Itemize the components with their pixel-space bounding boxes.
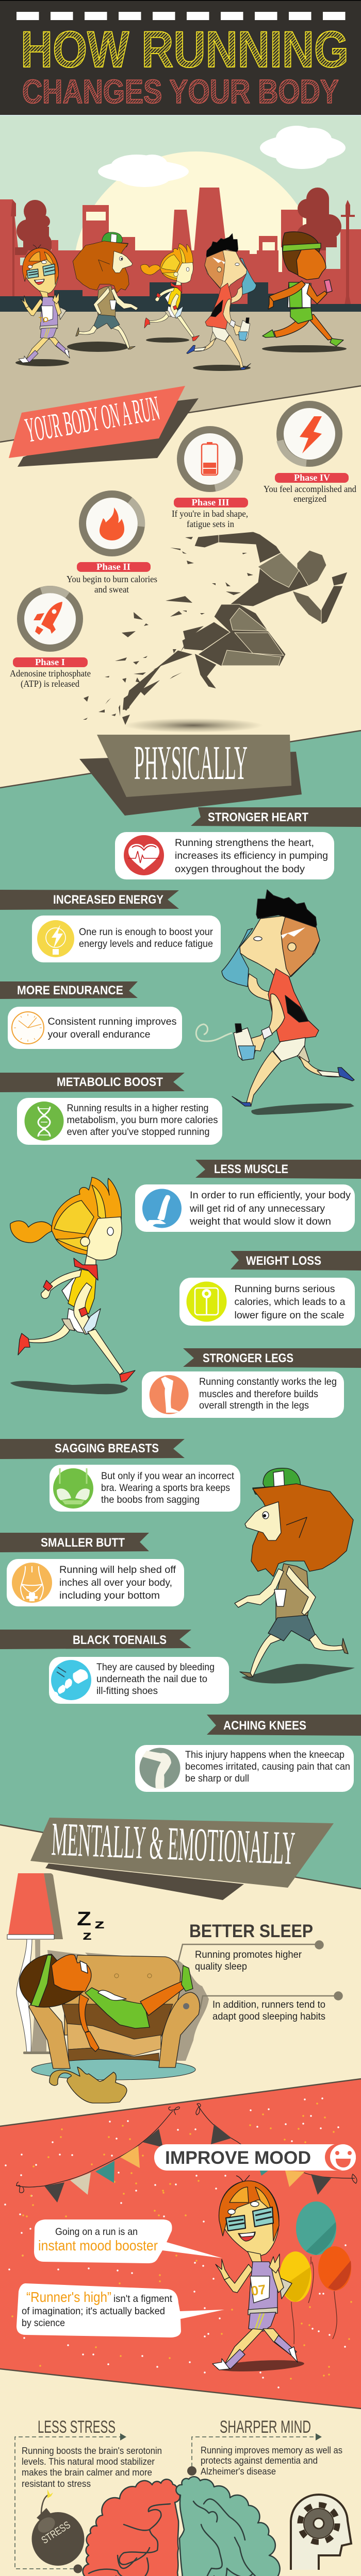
speech bubble: mood booster: Going on a run is an bbox=[55, 2226, 138, 2238]
banner: physically bbox=[79, 735, 302, 816]
ribbon: weight loss bbox=[231, 1251, 361, 1270]
sleep zzz: z bbox=[83, 1927, 92, 1943]
mood booster emphasis: instant mood booster bbox=[38, 2238, 158, 2253]
metabolic text: metabolism, you burn more calories bbox=[67, 1114, 218, 1126]
label: phase I bbox=[13, 657, 88, 667]
knees text: This injury happens when the kneecap bbox=[185, 1749, 344, 1760]
ribbon: stronger legs: STRONGER LEGS bbox=[203, 1351, 293, 1365]
runner: bearded bbox=[73, 232, 138, 349]
knees text: be sharp or dull bbox=[185, 1773, 249, 1784]
endurance text: your overall endurance bbox=[47, 1029, 151, 1040]
better sleep connector bbox=[178, 1941, 323, 1963]
runner: blonde bbox=[141, 244, 200, 341]
phase III bbox=[172, 430, 248, 529]
bra text: the boobs from sagging bbox=[101, 1494, 200, 1505]
phase II bbox=[67, 494, 157, 595]
phase IV text: You feel accomplished and bbox=[264, 484, 356, 494]
sharper mind text: Alzheimer's disease bbox=[201, 2466, 276, 2477]
second text: adapt good sleeping habits bbox=[212, 2011, 325, 2022]
ribbon: smaller butt: SMALLER BUTT bbox=[41, 1536, 125, 1550]
ribbon: less muscle bbox=[195, 1160, 361, 1179]
icon: rocket bbox=[34, 602, 62, 635]
legs text: muscles and therefore builds bbox=[199, 1388, 318, 1400]
icon: head with gear bbox=[290, 2494, 352, 2570]
ribbon: stronger heart bbox=[191, 807, 361, 827]
runners shadows bbox=[15, 337, 347, 371]
butt text: inches all over your body, bbox=[59, 1577, 172, 1588]
toenails text: underneath the nail due to bbox=[96, 1673, 207, 1685]
panel: more endurance bbox=[8, 1007, 182, 1049]
phase IV title: Phase IV bbox=[294, 472, 330, 483]
panel: metabolic boost bbox=[17, 1098, 222, 1145]
less stress text: makes the brain calmer and more bbox=[22, 2467, 152, 2478]
icon: heart bbox=[124, 835, 164, 875]
icon: lightning bbox=[300, 416, 322, 453]
phase II title: Phase II bbox=[96, 562, 130, 572]
icon: butt bbox=[12, 1563, 52, 1603]
green physical section bbox=[0, 731, 361, 1889]
icon: shattered sprinter bbox=[83, 532, 348, 725]
bunting right bbox=[196, 2104, 357, 2195]
connector: less stress bbox=[15, 2433, 126, 2573]
banner: your body on a run bbox=[9, 386, 199, 467]
phase IV bbox=[264, 404, 356, 504]
panel: weight loss bbox=[179, 1278, 355, 1326]
icon: light bulb bbox=[37, 920, 74, 957]
toenails text: They are caused by bleeding bbox=[96, 1662, 215, 1673]
ribbon: aching knees: ACHING KNEES bbox=[223, 1719, 306, 1733]
muscle text: In order to run efficiently, your body bbox=[190, 1190, 351, 1201]
ribbon: increased energy bbox=[0, 890, 179, 910]
heading: less stress: LESS STRESS bbox=[38, 2417, 116, 2437]
sleep zzz bbox=[77, 1908, 105, 1943]
better sleep heading: BETTER SLEEP bbox=[189, 1921, 313, 1941]
less stress text: Running boosts the brain's serotonin bbox=[22, 2446, 162, 2456]
cat bbox=[50, 2067, 127, 2103]
runner: glasses large bbox=[212, 2175, 298, 2370]
bra text: bra. Wearing a sports bra keeps bbox=[101, 1482, 230, 1494]
runner: towel and bottle bbox=[187, 233, 256, 369]
butt text: Running will help shed off bbox=[59, 1564, 176, 1575]
city skyline bbox=[0, 188, 361, 313]
icon: thin arm bbox=[142, 1189, 182, 1228]
panel: less muscle bbox=[135, 1184, 355, 1232]
speech bubble: runner's high: “Runner's high” bbox=[26, 2289, 111, 2305]
runner: glasses, bib TO bbox=[19, 245, 70, 363]
panel: aching knees bbox=[135, 1745, 354, 1792]
metabolic text: Running results in a higher resting bbox=[67, 1103, 208, 1114]
legs text: Running constantly works the leg bbox=[199, 1376, 337, 1387]
sharper mind text: Running improves memory as well as bbox=[201, 2445, 342, 2455]
metabolic text: even after you've stopped running bbox=[67, 1126, 209, 1138]
phase I title: Phase I bbox=[35, 657, 65, 667]
runner: headband and juice bbox=[262, 232, 343, 346]
sleeping runner bbox=[20, 1954, 193, 2052]
runner's high text: of imagination; it's actually backed bbox=[22, 2306, 165, 2317]
icon: scale bbox=[187, 1282, 227, 1322]
sleep zzz: z bbox=[94, 1916, 105, 1931]
runner: blonde large bbox=[10, 1177, 135, 1382]
panel: stronger legs bbox=[142, 1371, 344, 1418]
heading: sharper mind: SHARPER MIND bbox=[220, 2417, 311, 2437]
title panel bbox=[0, 0, 361, 116]
butt text: including your bottom bbox=[59, 1590, 160, 1601]
sky panel bbox=[0, 115, 361, 321]
heart text: Running strengthens the heart, bbox=[175, 837, 314, 849]
ribbon: increased energy: INCREASED ENERGY bbox=[53, 893, 163, 907]
label: phase III bbox=[174, 498, 248, 507]
icon: brain bbox=[83, 2477, 280, 2576]
lamp bbox=[7, 1873, 63, 2054]
sofa and sleeping runner bbox=[20, 1950, 209, 2103]
icon: sports bra bbox=[53, 1468, 93, 1509]
ribbon: more endurance bbox=[0, 981, 138, 999]
runner: bearded large shadow bbox=[241, 1664, 355, 1684]
panel: increased energy bbox=[32, 916, 221, 962]
ribbon: metabolic boost bbox=[0, 1073, 185, 1092]
phase II text: You begin to burn calories bbox=[67, 574, 157, 584]
improve mood pill: IMPROVE MOOD bbox=[165, 2148, 311, 2168]
panel: black toenails bbox=[49, 1657, 229, 1704]
icon: knee bbox=[139, 1748, 180, 1789]
second text: In addition, runners tend to bbox=[212, 1999, 325, 2010]
ribbon: black toenails bbox=[0, 1630, 191, 1649]
energy text: One run is enough to boost your bbox=[79, 926, 213, 938]
runner: towel large shadow bbox=[251, 1104, 354, 1115]
energy text: energy levels and reduce fatigue bbox=[79, 938, 213, 950]
icon: toes bbox=[51, 1660, 91, 1700]
runner: glasses large: 07 bbox=[250, 2281, 267, 2299]
ribbon: more endurance: MORE ENDURANCE bbox=[17, 984, 123, 997]
icon: smiley bbox=[325, 2144, 356, 2171]
phase I text: Adenosine triphosphate bbox=[10, 668, 91, 679]
muscle text: will get rid of any unnecessary bbox=[189, 1203, 325, 1214]
improve mood pill bbox=[154, 2144, 356, 2171]
panel: smaller butt bbox=[7, 1559, 184, 1606]
ribbon: stronger heart: STRONGER HEART bbox=[208, 810, 308, 824]
runner: blonde large shadow bbox=[10, 1381, 128, 1394]
confetti orange bbox=[12, 2104, 351, 2379]
runner: glasses, bib TO: TO bbox=[39, 315, 48, 324]
road dashes bbox=[17, 12, 346, 20]
phase IV text line 2: energized bbox=[293, 494, 326, 504]
shadow below sprinter bbox=[124, 718, 263, 733]
runner's high text: by science bbox=[22, 2317, 65, 2329]
ribbon: sagging breasts: SAGGING BREASTS bbox=[55, 1442, 159, 1455]
phase I bbox=[10, 589, 91, 689]
weight text: calories, which leads to a bbox=[234, 1296, 346, 1308]
cloud left bbox=[98, 155, 189, 187]
phase III text: If you're in bad shape, bbox=[172, 509, 248, 519]
cloud right bbox=[260, 126, 346, 169]
phase II text line 2: and sweat bbox=[94, 584, 129, 595]
speech bubble: mood booster bbox=[34, 2219, 222, 2263]
heart text: increases its efficiency in pumping bbox=[175, 850, 328, 861]
knees text: becomes irritated, causing pain that can bbox=[185, 1761, 350, 1772]
less stress text: levels. This natural mood stabilizer bbox=[22, 2456, 155, 2467]
icon: flame bbox=[100, 507, 124, 540]
panel: sagging breasts bbox=[50, 1465, 240, 1512]
sharper mind text: protects against dementia and bbox=[201, 2455, 318, 2466]
icon: leg bbox=[150, 1375, 189, 1414]
sun bbox=[73, 151, 319, 397]
ribbon: less muscle: LESS MUSCLE bbox=[214, 1162, 288, 1176]
bunting left bbox=[16, 2107, 179, 2202]
icon: stress bomb bbox=[32, 2489, 85, 2566]
sleep zzz: Z bbox=[77, 1908, 91, 1930]
icon: DNA bbox=[25, 1101, 64, 1141]
ribbon: sagging breasts bbox=[0, 1439, 185, 1459]
ribbon: weight loss: WEIGHT LOSS bbox=[246, 1254, 321, 1268]
legs text: overall strength in the legs bbox=[199, 1400, 309, 1411]
connector: sharper mind bbox=[187, 2433, 322, 2476]
less stress text: resistant to stress bbox=[22, 2479, 91, 2489]
better sleep text: quality sleep bbox=[195, 1961, 247, 1972]
ribbon: smaller butt bbox=[0, 1533, 149, 1552]
bra text: But only if you wear an incorrect bbox=[101, 1470, 235, 1482]
muscle text: weight that would slow it down bbox=[189, 1216, 331, 1227]
speech bubble: runner's high bbox=[17, 2283, 224, 2337]
phase III text line 2: fatigue sets in bbox=[187, 519, 234, 529]
phase III title: Phase III bbox=[192, 497, 229, 507]
ribbon: aching knees bbox=[207, 1715, 361, 1736]
confetti white bbox=[5, 2098, 346, 2387]
icon: battery bbox=[202, 442, 218, 475]
second connector bbox=[200, 1992, 342, 2009]
runner: bearded large bbox=[235, 1468, 353, 1677]
panel: stronger heart bbox=[115, 832, 334, 879]
ribbon: metabolic boost: METABOLIC BOOST bbox=[57, 1075, 163, 1089]
toenails text: ill-fitting shoes bbox=[96, 1685, 158, 1697]
icon: clock bbox=[12, 1012, 44, 1044]
label: phase IV bbox=[275, 473, 349, 483]
phase I text line 2: (ATP) is released bbox=[21, 679, 79, 689]
coral mood section bbox=[0, 2079, 361, 2409]
icon: stress bomb: STRESS bbox=[40, 2519, 73, 2546]
ribbon: black toenails: BLACK TOENAILS bbox=[73, 1633, 167, 1647]
balloons bbox=[280, 2201, 351, 2344]
better sleep text: Running promotes higher bbox=[195, 1949, 302, 1960]
road bbox=[0, 312, 361, 442]
runner's high text: isn't a figment bbox=[113, 2293, 173, 2304]
endurance text: Consistent running improves bbox=[47, 1016, 177, 1027]
runner: towel large bbox=[196, 890, 354, 1106]
rug bbox=[31, 2059, 195, 2080]
divider line bbox=[0, 1825, 361, 1889]
weight text: Running burns serious bbox=[234, 1283, 335, 1295]
ribbon: stronger legs bbox=[183, 1348, 361, 1368]
weight text: lower figure on the scale bbox=[234, 1310, 344, 1321]
runner shadow bbox=[217, 2359, 304, 2373]
heart text: oxygen throughout the body bbox=[175, 863, 305, 875]
label: phase II bbox=[77, 562, 151, 572]
